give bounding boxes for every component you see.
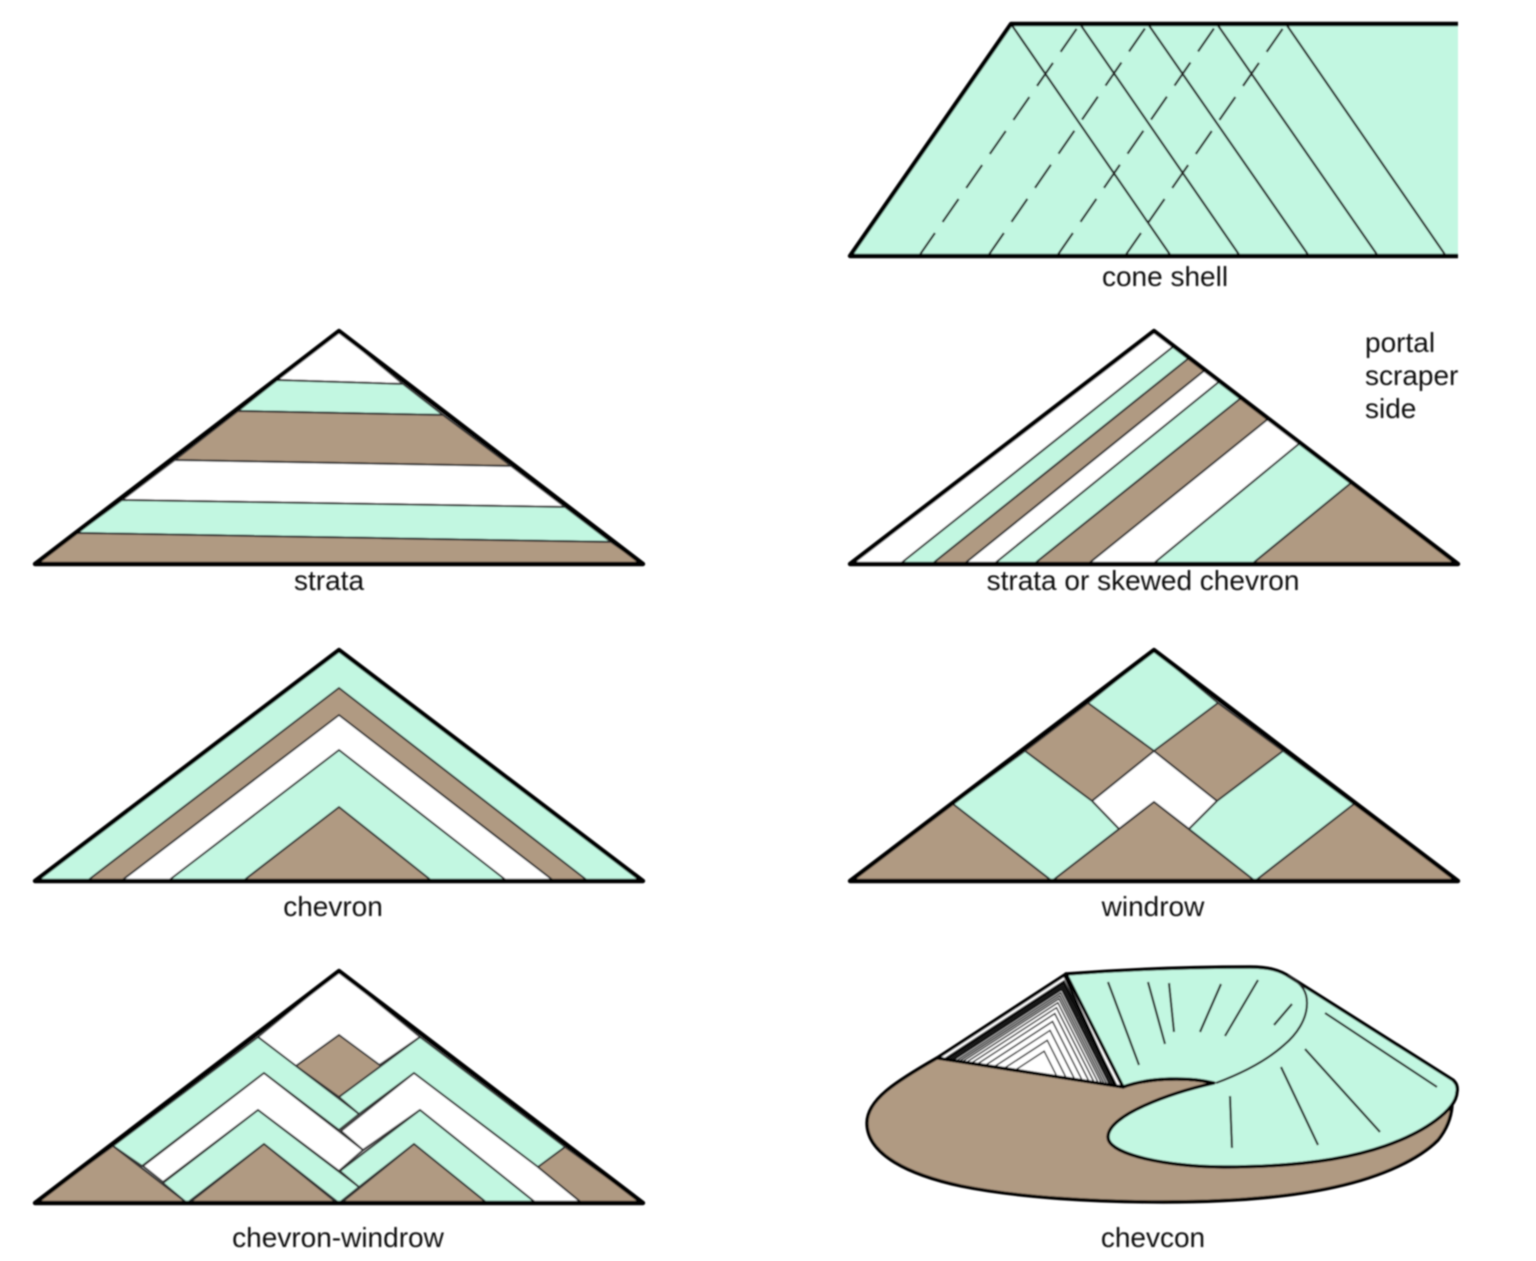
cross-section wedge with nested chevrons	[937, 974, 1123, 1087]
panel: chevron-windrow	[35, 971, 643, 1253]
strata bands	[35, 331, 643, 564]
panel: chevron	[35, 650, 643, 922]
chevron bands	[35, 650, 643, 881]
label: cone shell: cone shell	[1102, 261, 1228, 292]
label: windrow: windrow	[1101, 891, 1205, 922]
label: chevron: chevron	[283, 891, 383, 922]
brown body	[867, 1058, 1452, 1202]
annotation: portal scraper side: side	[1365, 393, 1416, 424]
panel: strata or skewed chevron	[850, 331, 1458, 596]
radial fold lines	[1108, 980, 1437, 1148]
label: strata: strata	[294, 565, 364, 596]
outline	[850, 331, 1458, 564]
outline	[35, 331, 643, 564]
panel: strata	[35, 331, 643, 596]
label: strata or skewed chevron: strata or skewed chevron	[987, 565, 1299, 596]
windrow blocks	[850, 650, 1458, 881]
mint top surface	[1066, 967, 1457, 1167]
label: chevron-windrow: chevron-windrow	[232, 1222, 445, 1253]
annotation: portal scraper side: scraper	[1365, 360, 1458, 391]
outline	[35, 650, 643, 881]
solid fold lines	[1011, 24, 1446, 256]
outline	[35, 971, 643, 1203]
inner fold curve	[1216, 975, 1307, 1083]
mint fill	[849, 24, 1458, 256]
panel: cone shell	[849, 24, 1458, 292]
panel: chevcon	[867, 967, 1457, 1253]
annotation: portal scraper side	[1365, 327, 1458, 424]
panel: windrow	[850, 650, 1458, 922]
annotation: portal scraper side: portal	[1365, 327, 1435, 358]
label: chevcon: chevcon	[1101, 1222, 1205, 1253]
dashed fold lines	[919, 24, 1286, 256]
outline	[850, 650, 1458, 881]
outline	[850, 24, 1458, 256]
skewed bands	[850, 331, 1458, 564]
chevron-windrow blocks	[35, 971, 643, 1203]
